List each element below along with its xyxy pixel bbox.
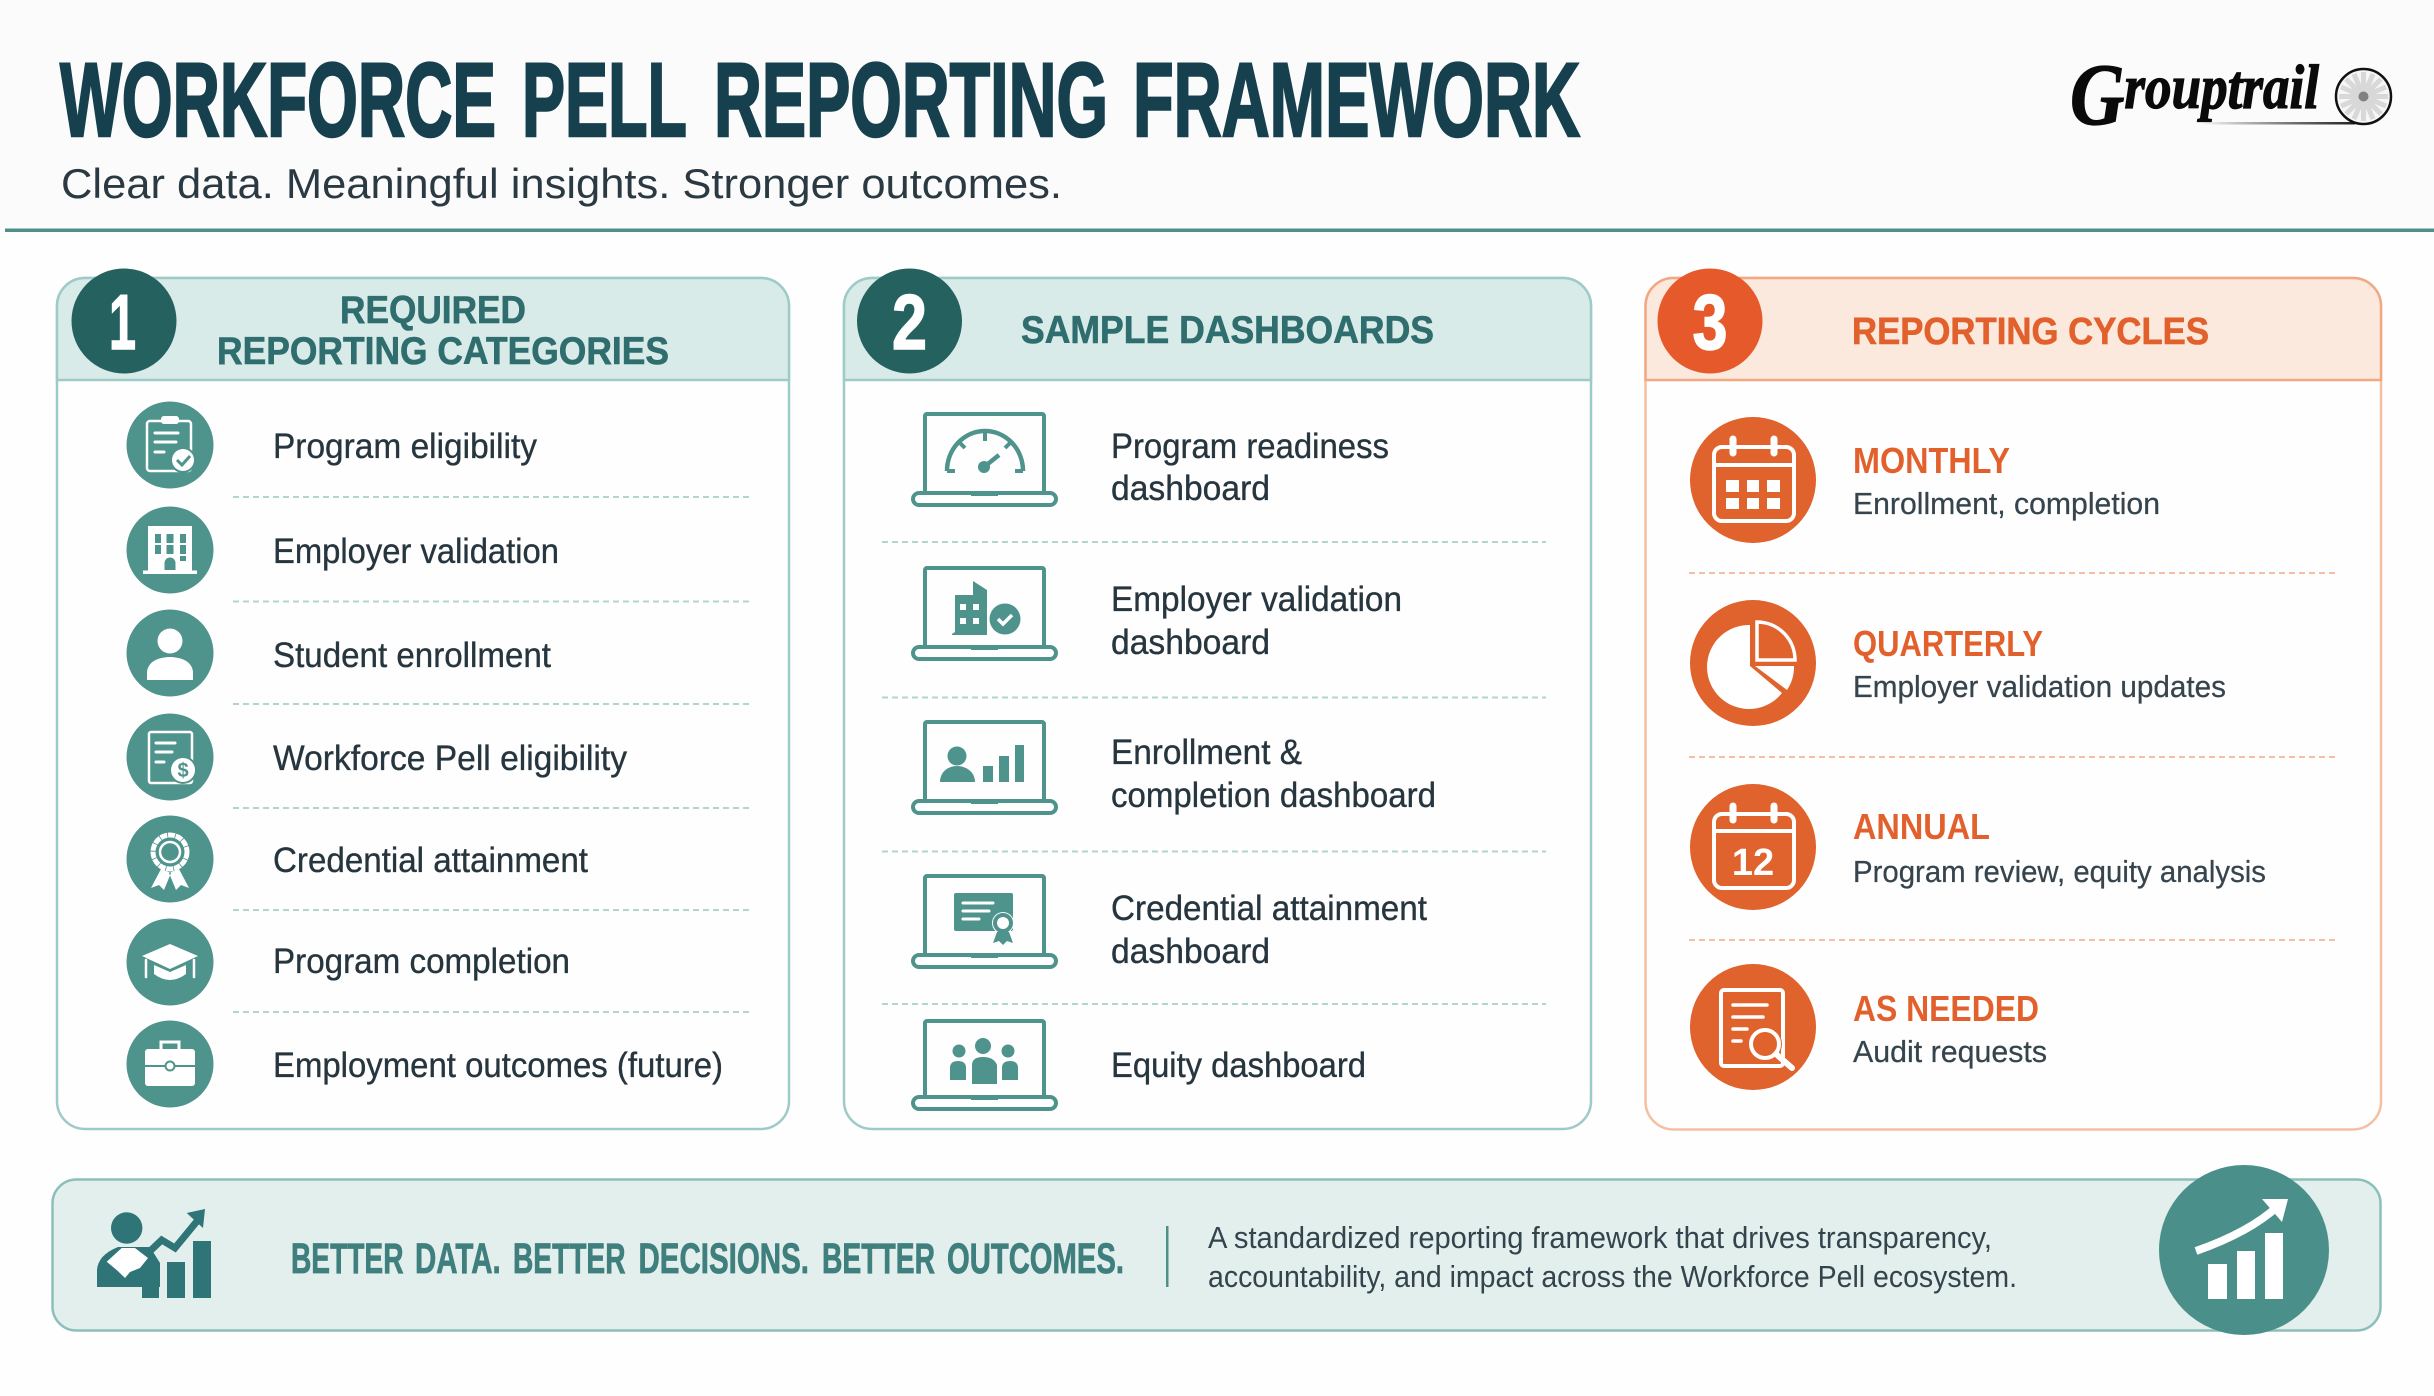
subtitle: Clear data. Meaningful insights. Stronger outcomes. <box>61 160 1062 207</box>
slogan: DATA. <box>415 1235 501 1283</box>
icon: graduation cap <box>126 918 214 1006</box>
icon: laptop gauge <box>913 414 1056 505</box>
title: FRAMEWORK <box>1133 42 1580 159</box>
slogan <box>291 1235 1124 1283</box>
icon: laptop person bars <box>913 722 1056 813</box>
icon: award ribbon <box>126 816 214 902</box>
header divider <box>5 228 2434 232</box>
banner: better data <box>52 1165 2380 1335</box>
title: WORKFORCE <box>60 42 496 159</box>
number badge 1 <box>72 268 176 374</box>
label: annual <box>1853 806 2266 889</box>
label: program completion: Program completion <box>273 942 570 981</box>
label: employer validation dashboard: Employer validation <box>1111 580 1402 619</box>
banner description: A standardized reporting framework that drives transparency, <box>1208 1220 1992 1255</box>
label: credential attainment dashboard: dashboard <box>1111 932 1270 971</box>
label: program eligibility: Program eligibility <box>273 427 537 466</box>
banner description <box>1208 1220 2017 1294</box>
label: employer validation dashboard: dashboard <box>1111 623 1270 662</box>
label: monthly: Enrollment, completion <box>1853 486 2160 521</box>
label: as needed: AS NEEDED <box>1853 988 2039 1029</box>
slogan: DECISIONS. <box>638 1235 809 1283</box>
number badge 1: 1 <box>109 278 136 366</box>
number badge 2: 2 <box>892 278 927 366</box>
label: monthly <box>1853 440 2160 521</box>
label: credential attainment: Credential attainment <box>273 841 588 880</box>
icon: laptop people <box>913 1021 1056 1109</box>
label: annual: ANNUAL <box>1853 806 1990 847</box>
label: quarterly: QUARTERLY <box>1853 623 2043 664</box>
panel 2 header band <box>844 278 1591 380</box>
label: student enrollment: Student enrollment <box>273 636 551 675</box>
label: employer validation: Employer validation <box>273 532 559 571</box>
label: equity dashboard: Equity dashboard <box>1111 1046 1366 1085</box>
title: PELL <box>522 42 687 159</box>
label: program readiness dashboard: dashboard <box>1111 469 1270 508</box>
number badge 3: 3 <box>1692 278 1728 366</box>
panel 3 header band <box>1646 278 2381 380</box>
banner description: accountability, and impact across the Workforce Pell ecosystem. <box>1208 1259 2017 1294</box>
panel: required reporting categories <box>57 268 789 1129</box>
label: enrollment and completion dashboard: Enrollment & <box>1111 733 1302 772</box>
label: credential attainment dashboard: Credential attainment <box>1111 889 1427 928</box>
title <box>60 42 1580 159</box>
number badge 3 <box>1658 268 1762 374</box>
icon: growth chart badge <box>2159 1165 2329 1335</box>
logo: Grouptrail <box>2070 47 2391 144</box>
title: REPORTING <box>714 42 1108 159</box>
icon: document with dollar <box>126 714 214 800</box>
panel 1 heading <box>217 289 669 373</box>
icon: annual calendar: 12 <box>1732 842 1774 884</box>
icon: building <box>126 506 214 594</box>
label: employer validation dashboard <box>1111 580 1402 662</box>
icon: person with growth chart <box>97 1209 211 1298</box>
number badge 2 <box>857 268 962 374</box>
panel 1 header band <box>57 278 789 380</box>
icon: laptop building check <box>913 568 1056 659</box>
label: enrollment and completion dashboard: completion dashboard <box>1111 776 1436 815</box>
icon: document with dollar: $ <box>177 760 189 782</box>
label: as needed <box>1853 988 2047 1069</box>
label: credential attainment dashboard <box>1111 889 1427 971</box>
label: workforce pell eligibility: Workforce Pell eligibility <box>273 739 627 778</box>
logo: Grouptrail: G <box>2070 47 2124 144</box>
icon: monthly calendar <box>1690 417 1816 543</box>
panel: sample dashboards <box>844 268 1591 1129</box>
panel 1 heading: REPORTING CATEGORIES <box>217 330 669 373</box>
icon: briefcase <box>126 1020 214 1108</box>
label: program readiness dashboard: Program readiness <box>1111 427 1389 466</box>
icon: clipboard check <box>126 402 214 488</box>
panel 2 heading: SAMPLE DASHBOARDS <box>1021 309 1434 352</box>
panel 1 heading: REQUIRED <box>340 289 526 332</box>
slogan: OUTCOMES. <box>947 1235 1124 1283</box>
slogan: BETTER <box>822 1235 935 1283</box>
label: quarterly <box>1853 623 2226 704</box>
label: as needed: Audit requests <box>1853 1034 2047 1069</box>
panel: reporting cycles <box>1646 268 2381 1130</box>
slogan: BETTER <box>291 1235 404 1283</box>
slogan: BETTER <box>513 1235 626 1283</box>
label: enrollment and completion dashboard <box>1111 733 1436 815</box>
label: quarterly: Employer validation updates <box>1853 669 2226 704</box>
icon: quarterly pie chart <box>1690 600 1816 726</box>
icon: audit document <box>1690 964 1816 1090</box>
logo: Grouptrail: rouptrail <box>2124 54 2320 122</box>
label: employment outcomes: Employment outcomes (future) <box>273 1046 723 1085</box>
icon: annual calendar <box>1690 784 1816 910</box>
label: monthly: MONTHLY <box>1853 440 2010 481</box>
label: annual: Program review, equity analysis <box>1853 854 2266 889</box>
panel 3 heading: REPORTING CYCLES <box>1852 311 2209 353</box>
icon: student <box>126 610 214 696</box>
label: program readiness dashboard <box>1111 427 1389 508</box>
icon: laptop certificate <box>913 876 1056 967</box>
